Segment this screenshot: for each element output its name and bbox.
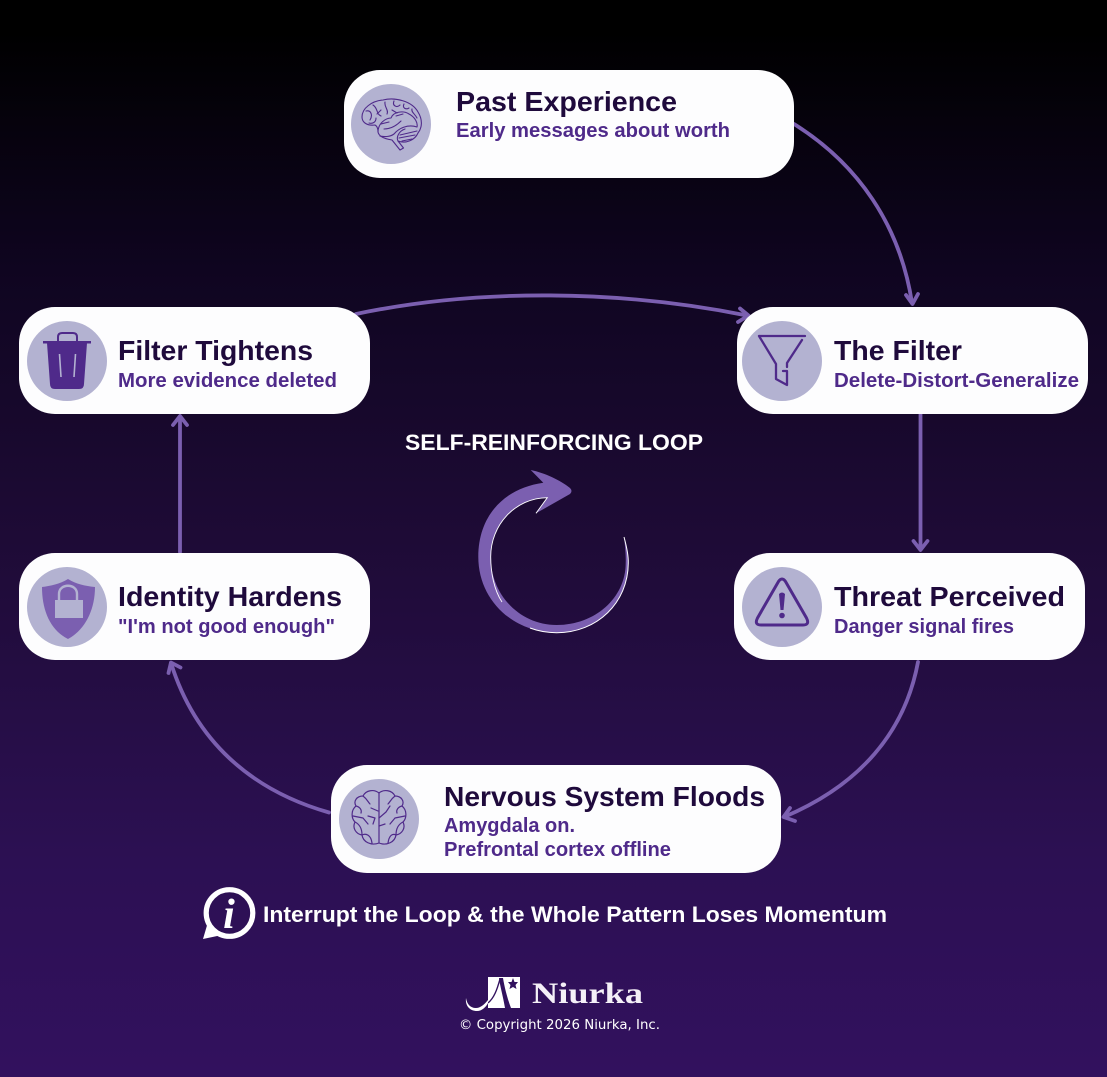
arrow: past experience to the filter bbox=[794, 124, 918, 304]
logo: Niurka bbox=[466, 977, 643, 1011]
arrow: filter tightens to the filter bbox=[356, 295, 748, 322]
arrow: the filter to threat perceived bbox=[914, 414, 928, 550]
panel: identity hardens bbox=[19, 553, 370, 660]
heading: Past Experience bbox=[456, 86, 677, 117]
subtitle: Early messages about worth bbox=[456, 120, 730, 142]
panel: nervous system floods bbox=[331, 765, 781, 873]
icon: trash can bbox=[43, 333, 91, 389]
subtitle: Delete-Distort-Generalize bbox=[834, 370, 1079, 392]
subtitle: Amygdala on. bbox=[444, 815, 575, 837]
subtitle line 2: Prefrontal cortex offline bbox=[444, 839, 671, 861]
subtitle: Danger signal fires bbox=[834, 616, 1014, 638]
panel: the filter bbox=[737, 307, 1088, 414]
panel: past experience bbox=[344, 70, 794, 178]
icon: top view brain bbox=[352, 791, 406, 844]
arrow: identity hardens to filter tightens bbox=[173, 416, 187, 552]
panel: filter tightens bbox=[19, 307, 370, 414]
icon: info speech bubble bbox=[203, 890, 253, 939]
heading: Filter Tightens bbox=[118, 335, 313, 366]
copyright: © Copyright 2026 Niurka, Inc. bbox=[459, 1018, 660, 1033]
icon: side view brain bbox=[362, 99, 421, 150]
heading: Nervous System Floods bbox=[444, 781, 765, 812]
logo wordmark: Niurka bbox=[532, 977, 643, 1010]
heading: Identity Hardens bbox=[118, 581, 342, 612]
icon: circular loop arrow bbox=[478, 470, 628, 633]
panel: threat perceived bbox=[734, 553, 1085, 660]
subtitle: More evidence deleted bbox=[118, 370, 337, 392]
subtitle: "I'm not good enough" bbox=[118, 616, 335, 638]
heading: Threat Perceived bbox=[834, 581, 1065, 612]
arrow: threat perceived to nervous system floods bbox=[784, 662, 918, 821]
icon: funnel bbox=[759, 336, 805, 385]
heading: The Filter bbox=[834, 335, 962, 366]
logo mark bbox=[466, 977, 520, 1011]
icon: warning triangle bbox=[756, 579, 808, 625]
icon: info speech bubble: i bbox=[223, 892, 235, 938]
callout text: Interrupt the Loop & the Whole Pattern Loses Momentum bbox=[263, 902, 887, 927]
icon: shield with padlock bbox=[42, 579, 95, 639]
arrow: nervous system floods to identity hardens bbox=[168, 662, 329, 812]
heading: self-reinforcing loop: SELF-REINFORCING LOOP bbox=[405, 430, 703, 455]
